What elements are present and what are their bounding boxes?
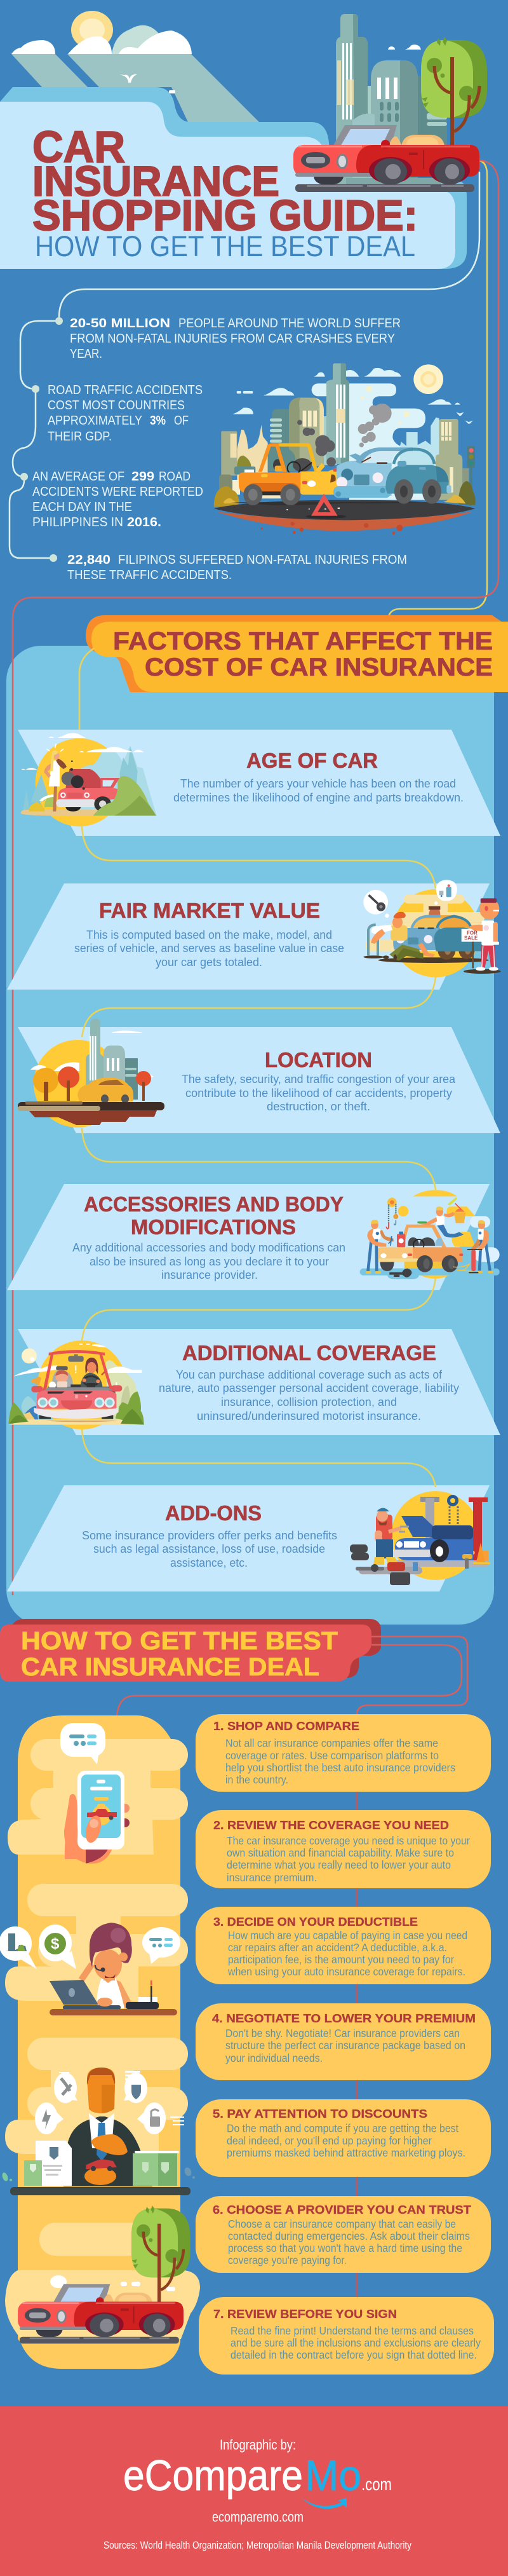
footer: ecomparemo.com bbox=[212, 2509, 304, 2525]
stat: 20-50 million: YEAR. bbox=[70, 347, 102, 361]
stat: 299 road accidents: 299 bbox=[131, 470, 154, 484]
footer bbox=[0, 2406, 508, 2576]
illustration: fair market value bbox=[363, 880, 501, 978]
banner: additional coverage: insurance, collision protection, and bbox=[221, 1395, 397, 1408]
banner: fair market value bbox=[7, 883, 490, 990]
illustration: age of car bbox=[21, 733, 157, 826]
card 6: coverage you're paying for. bbox=[228, 2254, 347, 2266]
stat: 299 road accidents: ACCIDENTS WERE REPORTED bbox=[32, 485, 203, 499]
panel: left illustrated column bbox=[5, 1715, 200, 2369]
banner: age of car bbox=[18, 730, 500, 836]
stat: 299 road accidents: AN AVERAGE OF bbox=[32, 470, 124, 484]
card 3: car repairs after an accident? A deductible, a.k.a. bbox=[228, 1941, 447, 1954]
card 5: 5. PAY ATTENTION TO DISCOUNTS bbox=[213, 2107, 427, 2120]
banner: add-ons: Some insurance providers offer perks and benefits bbox=[82, 1529, 337, 1542]
stat: 3% of GDP: OF bbox=[174, 414, 189, 428]
stat: 22,840 bbox=[67, 553, 407, 582]
banner: add-ons: ADD-ONS bbox=[165, 1501, 262, 1525]
stat: 22,840: THESE TRAFFIC ACCIDENTS. bbox=[67, 568, 232, 582]
header mountains bbox=[11, 54, 259, 122]
footer: .com bbox=[361, 2474, 392, 2494]
stat: 299 road accidents: PHILIPPINES IN bbox=[32, 515, 123, 529]
banner: location bbox=[18, 1027, 500, 1133]
stat: 20-50 million bbox=[70, 317, 401, 361]
banner: location: The safety, security, and traffic congestion of your area bbox=[182, 1072, 456, 1086]
how-to connector lines bbox=[117, 1637, 467, 1716]
factors heading bbox=[86, 615, 508, 692]
stat: 3% of GDP bbox=[48, 383, 203, 444]
card connector line bbox=[356, 1789, 358, 2301]
footer: Mo bbox=[305, 2451, 361, 2500]
footer: Infographic by: bbox=[220, 2437, 296, 2453]
banner: add-ons: assistance, etc. bbox=[170, 1556, 248, 1569]
title: CAR bbox=[32, 122, 125, 172]
title bbox=[32, 122, 418, 262]
banner: additional coverage bbox=[18, 1329, 500, 1435]
sun and clouds bbox=[11, 11, 421, 54]
card 2: insurance premium. bbox=[227, 1871, 317, 1884]
banner: location: destruction, or theft. bbox=[267, 1100, 370, 1113]
connector lines from car bbox=[13, 160, 498, 1625]
footer: eCompare bbox=[123, 2451, 303, 2500]
banner: accessories and body modifications: also be insured as long as you declare it to your bbox=[90, 1255, 329, 1268]
stat: 299 road accidents: ROAD bbox=[159, 470, 190, 484]
illustration: woman with headset bbox=[0, 1923, 180, 2015]
banner: fair market value: This is computed based on the make, model, and bbox=[86, 928, 332, 941]
illustration: additional coverage bbox=[8, 1340, 144, 1429]
stat: 3% of GDP: THEIR GDP. bbox=[48, 430, 112, 444]
how-to heading: CAR INSURANCE DEAL bbox=[21, 1653, 319, 1681]
banner: age of car: determines the likelihood of engine and parts breakdown. bbox=[173, 791, 464, 804]
card 4: structure the perfect car insurance package based on bbox=[225, 2039, 465, 2052]
card 1: help you shortlist the best auto insurance providers bbox=[225, 1761, 455, 1774]
banner: location: contribute to the likelihood of car accidents, property bbox=[185, 1086, 453, 1100]
illustration: fair market value: FOR bbox=[467, 930, 478, 936]
card 5: deal indeed, or you'll end up paying for higher bbox=[227, 2134, 432, 2147]
stat: 3% of GDP: ROAD TRAFFIC ACCIDENTS bbox=[48, 383, 203, 397]
banner: fair market value: your car gets totaled. bbox=[156, 955, 262, 969]
city illustration bbox=[336, 14, 447, 186]
card 4 bbox=[196, 2003, 491, 2080]
card 5: premiums masked behind attractive marketing ploys. bbox=[227, 2146, 465, 2159]
banner: add-ons bbox=[7, 1485, 490, 1591]
card 2: The car insurance coverage you need is unique to your bbox=[227, 1834, 470, 1847]
bottom red car and tree bbox=[18, 2205, 190, 2343]
banner: additional coverage: uninsured/underinsured motorist insurance. bbox=[197, 1409, 421, 1422]
card 6: contacted during emergencies. Ask about their claims bbox=[228, 2230, 470, 2242]
footer: Sources: World Health Organization; Metropolitan Manila Development Authority bbox=[104, 2539, 411, 2551]
card 4: your individual needs. bbox=[225, 2052, 323, 2064]
illustration: location bbox=[18, 1019, 164, 1128]
card 5 bbox=[196, 2099, 491, 2177]
factors heading: COST OF CAR INSURANCE bbox=[145, 653, 493, 681]
how-to heading bbox=[0, 1619, 381, 1682]
banner: add-ons: such as legal assistance, loss of use, roadside bbox=[93, 1542, 325, 1555]
banner: additional coverage: You can purchase additional coverage such as acts of bbox=[176, 1368, 443, 1381]
banner: additional coverage: ADDITIONAL COVERAGE bbox=[182, 1341, 436, 1365]
factors vertical red line segment bbox=[12, 636, 13, 1595]
card 6: process so that you won't have a hard time using the bbox=[228, 2242, 462, 2254]
crash illustration bbox=[214, 364, 476, 535]
card 7: Read the fine print! Understand the terms and clauses bbox=[231, 2324, 474, 2337]
card 7: detailed in the contract before you sign that dotted line. bbox=[231, 2348, 477, 2361]
illustration: businessman bbox=[1, 2068, 195, 2195]
card 4: 4. NEGOTIATE TO LOWER YOUR PREMIUM bbox=[212, 2012, 476, 2025]
card 1: Not all car insurance companies offer the same bbox=[225, 1736, 438, 1749]
card 4: Don't be shy. Negotiate! Car insurance providers can bbox=[225, 2027, 460, 2040]
card 3: participation fee, is the amount you need to pay for bbox=[228, 1953, 454, 1966]
card 7: and be sure all the inclusions and exclusions are clearly bbox=[231, 2336, 481, 2349]
factors yellow path bbox=[79, 648, 94, 735]
banner: location: LOCATION bbox=[265, 1048, 372, 1072]
banner: additional coverage: nature, auto passenger personal accident coverage, liability bbox=[159, 1381, 460, 1394]
card 1: in the country. bbox=[225, 1773, 288, 1786]
illustration: fair market value: SALE bbox=[464, 935, 478, 941]
how-to heading: HOW TO GET THE BEST bbox=[21, 1627, 338, 1655]
illustration: accessories and body modifications bbox=[360, 1190, 500, 1279]
card 1: coverage or rates. Use comparison platforms to bbox=[225, 1749, 439, 1762]
banner: age of car: The number of years your vehicle has been on the road bbox=[180, 777, 456, 790]
card 5: Do the math and compute if you are getting the best bbox=[227, 2122, 458, 2134]
stat: 299 road accidents bbox=[32, 470, 203, 529]
stat: 20-50 million: PEOPLE AROUND THE WORLD SUFFER bbox=[178, 317, 401, 331]
stat: 20-50 million: FROM NON-FATAL INJURIES FROM CAR CRASHES EVERY bbox=[70, 332, 395, 346]
card 6 bbox=[196, 2196, 491, 2273]
card 6: 6. CHOOSE A PROVIDER YOU CAN TRUST bbox=[213, 2203, 472, 2216]
illustration: phone bbox=[60, 1723, 130, 1864]
card 2: determine what you really need to lower your auto bbox=[227, 1858, 451, 1871]
banner: age of car: AGE OF CAR bbox=[246, 749, 378, 772]
card 3 bbox=[196, 1907, 491, 1984]
stat: 299 road accidents: 2016. bbox=[127, 515, 161, 529]
banner: accessories and body modifications bbox=[7, 1184, 490, 1290]
card 3: How much are you capable of paying in case you need bbox=[228, 1929, 467, 1942]
card 3: when using your auto insurance coverage for repairs. bbox=[227, 1965, 465, 1978]
factors heading: FACTORS THAT AFFECT THE bbox=[113, 627, 493, 655]
connector: yellow curves between banners bbox=[82, 826, 436, 1487]
card 1: 1. SHOP AND COMPARE bbox=[213, 1719, 359, 1733]
banner: accessories and body modifications: MODIFICATIONS bbox=[131, 1215, 296, 1239]
stats connector line and dots bbox=[10, 317, 63, 562]
illustration: woman with headset: $ bbox=[51, 1935, 60, 1952]
card 7 bbox=[199, 2297, 494, 2375]
card 7: 7. REVIEW BEFORE YOU SIGN bbox=[213, 2307, 397, 2320]
stat: 3% of GDP: COST MOST COUNTRIES bbox=[48, 399, 185, 412]
stat: 20-50 million: 20-50 MILLION bbox=[70, 317, 170, 331]
card 2: 2. REVIEW THE COVERAGE YOU NEED bbox=[213, 1818, 449, 1832]
card 2: own situation and financial capability. Make sure to bbox=[227, 1846, 454, 1859]
panel: factors background bbox=[6, 646, 494, 1625]
stat: 299 road accidents: EACH DAY IN THE bbox=[32, 500, 132, 514]
stat: 3% of GDP: 3% bbox=[150, 414, 166, 428]
stat: 22,840: 22,840 bbox=[67, 553, 110, 567]
card 3: 3. DECIDE ON YOUR DEDUCTIBLE bbox=[213, 1915, 418, 1928]
title: HOW TO GET THE BEST DEAL bbox=[35, 230, 415, 262]
banner: fair market value: FAIR MARKET VALUE bbox=[99, 899, 320, 922]
card 2 bbox=[196, 1810, 491, 1888]
banner: accessories and body modifications: Any additional accessories and body modifications can bbox=[72, 1241, 345, 1254]
stat: 3% of GDP: APPROXIMATELY bbox=[48, 414, 142, 428]
banner: accessories and body modifications: insurance provider. bbox=[161, 1268, 258, 1281]
stat: 22,840: FILIPINOS SUFFERED NON-FATAL INJURIES FROM bbox=[118, 553, 407, 567]
red car and tree bbox=[293, 37, 487, 192]
banner: accessories and body modifications: ACCESSORIES AND BODY bbox=[84, 1192, 344, 1216]
banner: fair market value: series of vehicle, and serves as baseline value in case bbox=[74, 941, 344, 955]
card 1 bbox=[196, 1714, 491, 1792]
header panel bbox=[0, 87, 467, 269]
illustration: add-ons bbox=[350, 1491, 490, 1585]
title: SHOPPING GUIDE: bbox=[32, 191, 418, 240]
card 6: Choose a car insurance company that can easily be bbox=[228, 2218, 456, 2230]
title: INSURANCE bbox=[32, 158, 279, 205]
